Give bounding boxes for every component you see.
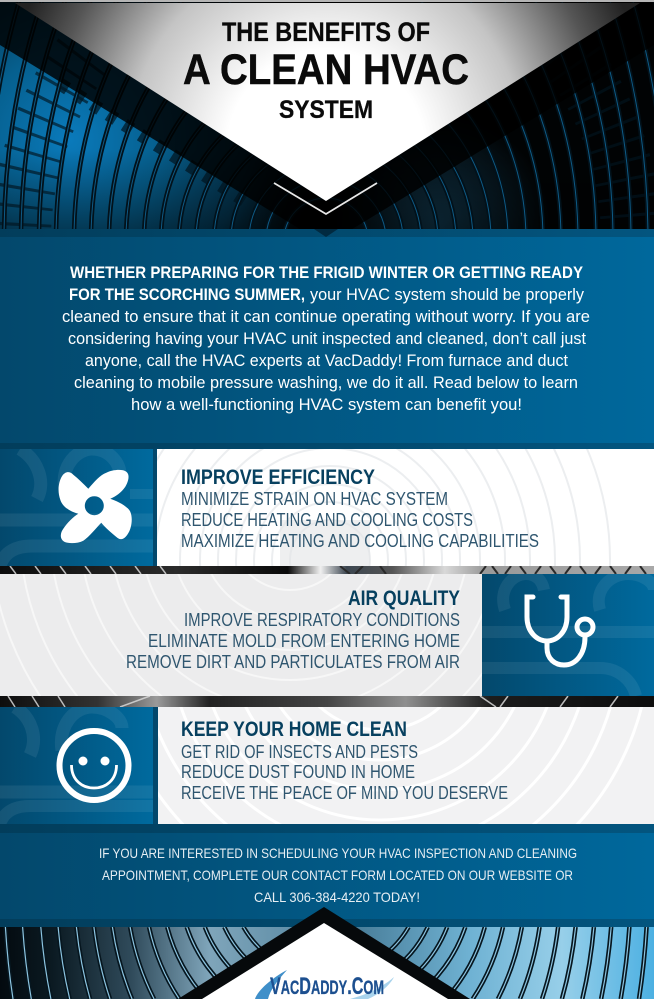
- footer dark chevron: [178, 907, 470, 999]
- call to action text: IF YOU ARE INTERESTED IN SCHEDULING YOUR HVAC INSPECTION AND CLEANING: [99, 845, 577, 861]
- panel texture: [0, 574, 482, 696]
- title: [183, 17, 469, 124]
- text: improve efficiency: MAXIMIZE HEATING AND COOLING CAPABILITIES: [181, 531, 539, 551]
- intro text: [62, 263, 590, 414]
- panel texture: [158, 707, 643, 824]
- icon: stethoscope: [527, 597, 593, 665]
- call to action text: [99, 845, 577, 905]
- text: air quality: ELIMINATE MOLD FROM ENTERING HOME: [148, 631, 460, 651]
- intro text: FOR THE SCORCHING SUMMER,: [69, 285, 305, 304]
- intro text: your HVAC system should be properly: [310, 285, 584, 304]
- text: improve efficiency: REDUCE HEATING AND COOLING COSTS: [181, 510, 473, 530]
- text: air quality: REMOVE DIRT AND PARTICULATES FROM AIR: [126, 652, 460, 672]
- title: THE BENEFITS OF: [222, 17, 430, 47]
- photo strip between panels: [0, 566, 654, 707]
- text: keep your home clean: [181, 718, 508, 803]
- intro text: how a well-functioning HVAC system can benefit you!: [131, 395, 522, 414]
- intro text: cleaning to mobile pressure washing, we do it all. Read below to learn: [74, 373, 578, 392]
- text: improve efficiency: [181, 466, 539, 551]
- text: improve efficiency: MINIMIZE STRAIN ON HVAC SYSTEM: [181, 489, 448, 509]
- icon: smiley face: [60, 731, 128, 800]
- text: keep your home clean: KEEP YOUR HOME CLEAN: [181, 718, 407, 741]
- text: air quality: [126, 587, 460, 672]
- icon: chevron arrow: [274, 183, 377, 214]
- footer white panel: [202, 923, 448, 999]
- top edge line: [0, 0, 654, 2]
- panel: call to action: [0, 824, 654, 927]
- panel: improve efficiency: [0, 449, 654, 566]
- panel: smiley icon tile: [0, 707, 153, 824]
- header fan background: [0, 2, 654, 229]
- call to action text: CALL 306-384-4220 TODAY!: [254, 889, 420, 905]
- panel: fan icon tile: [0, 449, 153, 566]
- footer fan background: [0, 927, 654, 999]
- header white chevron panel: [15, 3, 640, 201]
- text: keep your home clean: REDUCE DUST FOUND IN HOME: [181, 762, 415, 782]
- panel: stethoscope icon tile: [482, 574, 654, 696]
- panel: keep your home clean: [0, 707, 654, 824]
- intro text: WHETHER PREPARING FOR THE FRIGID WINTER OR GETTING READY: [70, 263, 584, 282]
- panel: air quality: [0, 574, 654, 696]
- text: air quality: IMPROVE RESPIRATORY CONDITIONS: [184, 610, 460, 630]
- intro text: anyone, call the HVAC experts at VacDaddy! From furnace and duct: [85, 351, 568, 370]
- text: air quality: AIR QUALITY: [348, 587, 460, 610]
- icon: fan: [59, 470, 132, 543]
- text: improve efficiency: IMPROVE EFFICIENCY: [181, 466, 375, 489]
- title: A CLEAN HVAC: [183, 46, 469, 94]
- panel texture: [157, 449, 611, 566]
- call to action text: APPOINTMENT, COMPLETE OUR CONTACT FORM LOCATED ON OUR WEBSITE OR: [102, 867, 573, 883]
- panel: introduction: [0, 229, 654, 449]
- text: keep your home clean: RECEIVE THE PEACE OF MIND YOU DESERVE: [181, 783, 508, 803]
- intro text: considering having your HVAC unit inspected and cleaned, don’t call just: [68, 329, 586, 348]
- title: SYSTEM: [279, 96, 373, 124]
- intro text: cleaned to ensure that it can continue operating without worry. If you are: [62, 307, 590, 326]
- text: keep your home clean: GET RID OF INSECTS AND PESTS: [181, 742, 418, 762]
